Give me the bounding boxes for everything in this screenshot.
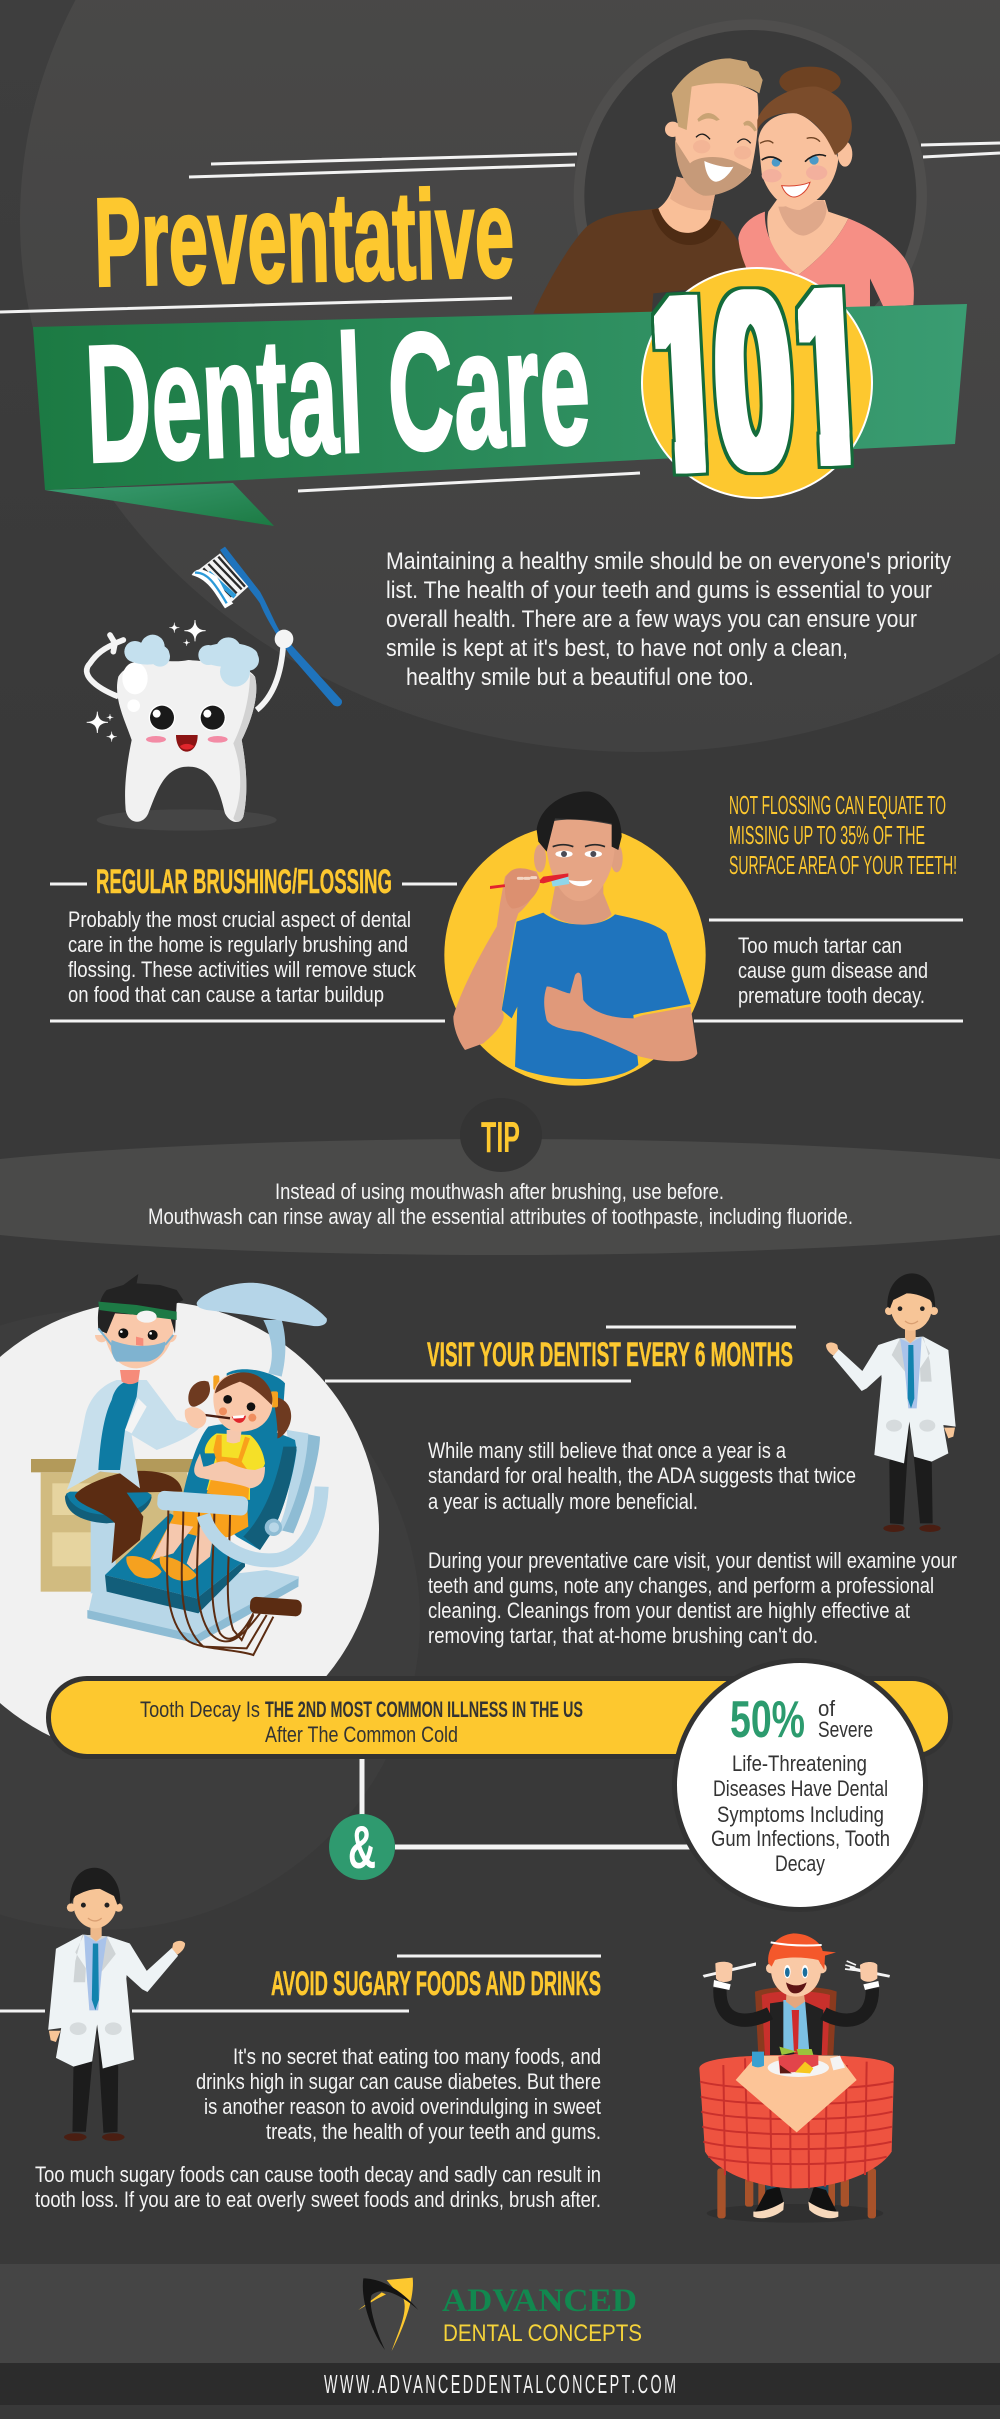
callout: flossing fact — [729, 790, 957, 880]
title: Preventative: Preventative — [92, 163, 516, 313]
tip band: Instead of using mouthwash after brushing, use before. — [275, 1179, 724, 1204]
connector lines — [362, 1754, 700, 1847]
text: visit paragraph one: a year is actually more beneficial. — [428, 1489, 698, 1514]
yellow fact pill: After The Common Cold — [265, 1722, 458, 1747]
text: sugar paragraph one — [196, 2044, 602, 2144]
text: brushing paragraph: Probably the most crucial aspect of dental — [68, 907, 411, 932]
callout circle: 50%: 50% — [730, 1691, 805, 1749]
yellow fact pill: Tooth Decay Is — [140, 1697, 260, 1722]
tip band: TIP — [481, 1113, 520, 1162]
text: tartar note: cause gum disease and — [738, 958, 928, 983]
text: sugar paragraph one: drinks high in sugar can cause diabetes. But there — [196, 2069, 601, 2094]
badge: 101: 1 — [639, 243, 729, 525]
illustration: boy eating at table — [699, 1933, 894, 2223]
footer url band: WWW.ADVANCEDDENTALCONCEPT.COM — [324, 2371, 676, 2399]
white circle behind dentist — [0, 1301, 379, 1759]
title: Dental Care: Dental Care — [82, 293, 593, 498]
badge: 101: 1 — [784, 235, 874, 518]
heading: avoid sugary foods — [0, 1956, 601, 2011]
text: visit paragraph two: cleaning. Cleanings from your dentist are highly effective at — [428, 1598, 911, 1623]
callout circle: 50%: Decay — [775, 1851, 826, 1876]
heading: regular brushing: REGULAR BRUSHING/FLOSSING — [96, 863, 392, 901]
text: sugar paragraph two: Too much sugary foods can cause tooth decay and sadly can result in — [35, 2162, 601, 2187]
callout circle: 50%: Gum Infections, Tooth — [711, 1826, 890, 1851]
green ribbon — [33, 304, 967, 526]
illustration: man brushing teeth — [444, 792, 706, 1086]
text: tartar note — [50, 920, 963, 1021]
callout circle: 50%: Diseases Have Dental — [713, 1776, 888, 1801]
illustration: doctor left — [48, 1868, 185, 2141]
icon: logo tooth — [358, 2278, 418, 2351]
logo text — [442, 2283, 642, 2347]
intro paragraph: list. The health of your teeth and gums is essential to your — [386, 577, 932, 604]
text: sugar paragraph one: is another reason to avoid overindulging in sweet — [204, 2094, 602, 2119]
text: visit paragraph one: While many still believe that once a year is a — [428, 1438, 786, 1463]
intro paragraph: healthy smile but a beautiful one too. — [406, 664, 754, 691]
callout circle: 50% — [672, 1658, 928, 1912]
logo text: ADVANCED — [442, 2283, 637, 2319]
intro paragraph — [386, 548, 952, 691]
badge: 101: 0 — [708, 239, 799, 522]
header illustration: couple — [533, 19, 927, 373]
yellow fact pill: THE 2ND MOST COMMON ILLNESS IN THE US — [265, 1697, 583, 1722]
heading: visit your dentist — [325, 1327, 796, 1381]
intro paragraph: overall health. There are a few ways you can ensure your — [386, 606, 917, 633]
decorative title lines — [0, 143, 1000, 491]
callout circle: 50%: Symptoms Including — [717, 1802, 884, 1827]
text: sugar paragraph one: treats, the health of your teeth and gums. — [266, 2119, 601, 2144]
heading: avoid sugary foods: AVOID SUGARY FOODS AND DRINKS — [271, 1965, 601, 2003]
text: sugar paragraph two: tooth loss. If you are to eat overly sweet foods and drinks, brush after. — [35, 2187, 601, 2212]
ampersand badge: & — [348, 1814, 376, 1881]
footer url band — [0, 2363, 1000, 2405]
text: sugar paragraph one: It's no secret that eating too many foods, and — [233, 2044, 601, 2069]
text: brushing paragraph: care in the home is regularly brushing and — [68, 932, 408, 957]
intro paragraph: smile is kept at it's best, to have not only a clean, — [386, 635, 848, 662]
ampersand badge — [329, 1814, 395, 1881]
text: brushing paragraph — [68, 907, 417, 1007]
tip band — [0, 1098, 1000, 1255]
text: sugar paragraph two — [35, 2162, 601, 2212]
callout circle: 50%: Severe — [818, 1717, 873, 1742]
illustration: dentist and child — [31, 1274, 327, 1655]
footer logo band — [0, 2264, 1000, 2363]
text: visit paragraph one: standard for oral health, the ADA suggests that twice — [428, 1463, 856, 1488]
text: tartar note: Too much tartar can — [738, 933, 902, 958]
text: brushing paragraph: flossing. These activities will remove stuck — [68, 957, 417, 982]
logo text: DENTAL CONCEPTS — [443, 2320, 642, 2347]
text: brushing paragraph: on food that can cause a tartar buildup — [68, 982, 384, 1007]
badge: 101 — [641, 267, 873, 499]
text: tartar note: premature tooth decay. — [738, 983, 925, 1008]
callout circle: 50%: Life-Threatening — [732, 1751, 867, 1776]
yellow fact pill — [46, 1676, 953, 1759]
text: visit paragraph one — [428, 1438, 856, 1514]
icon: happy tooth with toothbrush — [87, 547, 342, 831]
illustration: doctor right — [826, 1273, 956, 1532]
callout circle: 50%: of — [818, 1696, 836, 1721]
text: visit paragraph two — [428, 1548, 957, 1648]
tip band: Mouthwash can rinse away all the essential attributes of toothpaste, including fluoride. — [148, 1204, 853, 1229]
text: visit paragraph two: removing tartar, that at-home brushing can't do. — [428, 1623, 818, 1648]
